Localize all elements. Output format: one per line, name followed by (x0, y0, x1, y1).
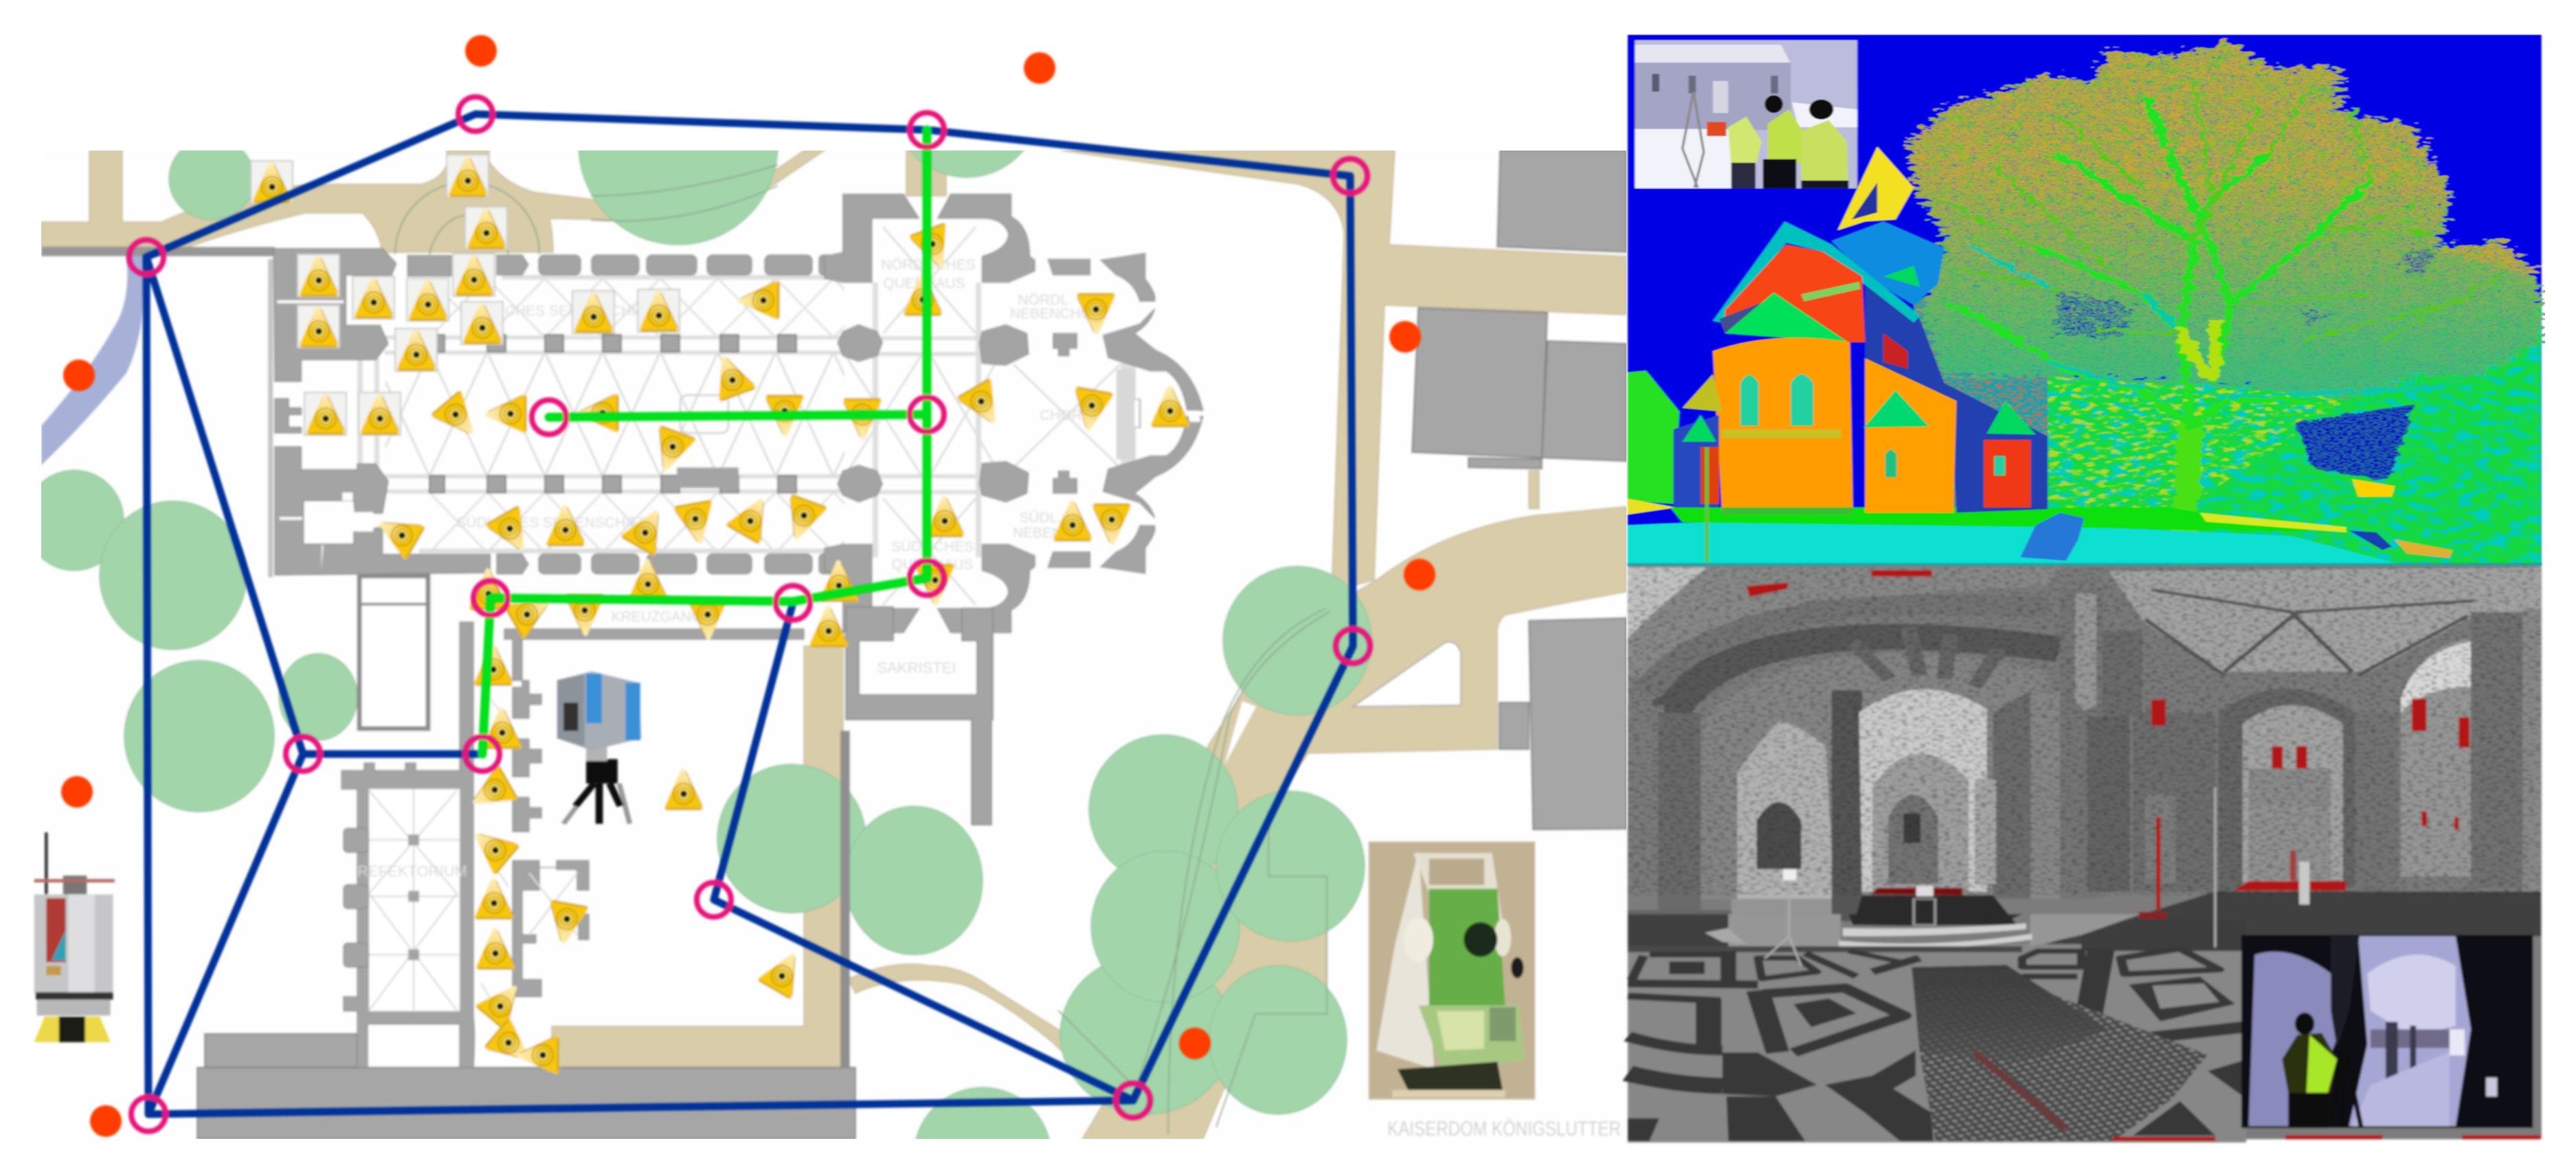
plan: organ and altar details (677, 467, 739, 488)
road outlines seen through trees (395, 165, 1330, 1134)
river (41, 256, 146, 465)
garden wall line (41, 247, 275, 256)
station markers: pink circles (129, 97, 1370, 1131)
plan: west walls (268, 249, 490, 577)
icon: Leica total station photo (1369, 842, 1535, 1099)
plan room labels: NÖRDLICHES (881, 257, 976, 273)
scan: mid-ground behind the church (1914, 298, 2060, 518)
outer traverse: blue lines (146, 114, 1353, 1114)
plan: vaults (385, 352, 844, 476)
plan: cloister (341, 622, 804, 1067)
plan room labels: LICHES SEITENSCHIFF (493, 303, 653, 319)
scan: green background vegetation (2048, 305, 2541, 564)
cathedral floor plan (268, 194, 1203, 1067)
inner traverse: green lines (482, 130, 927, 754)
panel: site plan map (41, 151, 1626, 1139)
interior: walls and vaults (1628, 564, 2542, 1139)
scan: ground bands (1628, 521, 2401, 564)
scan: church building (1673, 147, 2048, 562)
inset photo: survey crew in snow (1635, 40, 1857, 188)
paths and roads (41, 151, 1626, 1139)
plan room labels: KREUZGANG (611, 609, 703, 625)
plan room labels: REFEKTORIUM (357, 863, 467, 880)
icon: laser scanner on tripod (557, 672, 641, 823)
scan: parked car (2020, 513, 2084, 561)
control points: red dots (61, 35, 1435, 1137)
plan: east end (825, 194, 1203, 633)
trees (41, 151, 1373, 1139)
plan room labels (357, 257, 1102, 880)
plan room labels: QUERHAUS (883, 276, 965, 291)
interior: details, red no-data areas and inset (1747, 570, 2541, 1139)
plan room labels: NEBEN (1013, 525, 1062, 541)
plan room labels: NEBENCHOR (1010, 306, 1102, 322)
plan room labels: SÜDL. (1019, 510, 1062, 526)
plan: sacristy and south annex (846, 607, 993, 825)
panel: panoramic greyscale scan of cathedral interior (1628, 564, 2542, 1142)
target markers (251, 155, 1189, 1074)
plan room labels: CHOR (1040, 408, 1082, 423)
scan: tree canopy (1907, 42, 2541, 397)
icon: Riegl laser scanner (34, 832, 115, 1042)
caption: Kaiserdom Königslutter: KAISERDOM KÖNIGSLUTTER (1387, 1118, 1621, 1140)
panel: false-colour laser scan of cathedral and tree (1628, 35, 2542, 565)
plan room labels: QUERHAUS (891, 557, 974, 573)
plan room labels: SAKRISTEI (877, 659, 956, 676)
scan: tree trunk and branches (1938, 81, 2498, 561)
buildings (197, 151, 1626, 1139)
plan room labels: SÜDLICHES (891, 539, 974, 555)
inset photo: surveyor in cloister (2241, 935, 2533, 1128)
plan room labels: SÜDLICHES SEITENSCHIFF (456, 515, 647, 531)
interior: tiled floor (1628, 914, 2246, 1142)
plan room labels: NÖRDL. (1018, 292, 1073, 308)
